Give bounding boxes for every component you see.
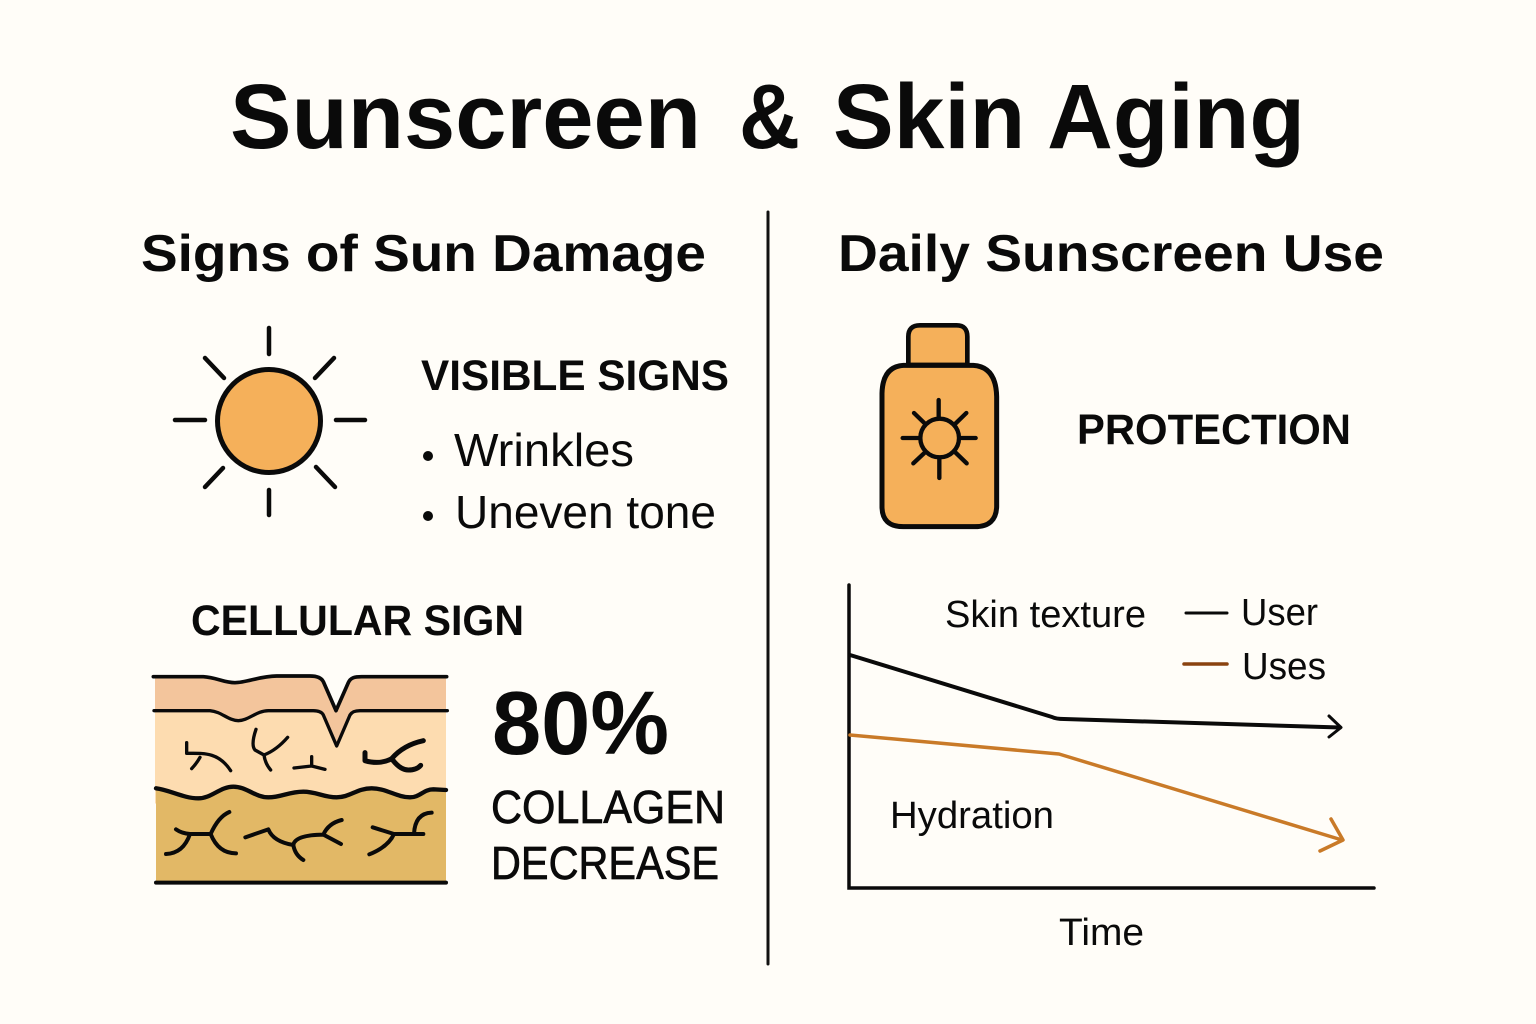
legend [1184, 592, 1326, 688]
stat: 80% collagen decrease: COLLAGEN [491, 781, 725, 833]
text: visible signs: VISIBLE SIGNS [421, 352, 729, 400]
line: user [850, 655, 1341, 737]
line: uses [850, 735, 1343, 851]
icon: skin cross-section [153, 676, 447, 883]
title: & [739, 66, 800, 168]
heading: signs of sun damage: Signs of Sun Damage [141, 225, 706, 283]
heading: cellular sign: CELLULAR SIGN [191, 597, 524, 645]
icon: sunscreen bottle [882, 325, 997, 527]
title: Skin Aging [833, 66, 1305, 168]
center divider [766, 212, 770, 964]
title: Sunscreen [230, 66, 701, 168]
text: visible signs: Uneven tone [455, 486, 716, 538]
legend: User [1241, 592, 1318, 634]
panel: daily sunscreen use [838, 225, 1384, 954]
title [230, 66, 1305, 168]
icon: sun [175, 328, 365, 515]
chart label: skin texture: Skin texture [945, 594, 1146, 636]
stat: 80% collagen decrease [491, 674, 725, 889]
stat: 80% collagen decrease: DECREASE [491, 837, 719, 889]
chart label: hydration: Hydration [890, 795, 1054, 837]
axis label: time: Time [1059, 912, 1144, 954]
line chart [849, 585, 1374, 954]
label: protection: PROTECTION [1077, 406, 1351, 454]
legend: Uses [1242, 646, 1326, 688]
chart axes [849, 585, 1374, 888]
text: visible signs [421, 352, 729, 538]
panel: signs of sun damage [141, 225, 729, 889]
text: visible signs: Wrinkles [454, 424, 634, 476]
stat: 80% collagen decrease: 80% [492, 674, 669, 774]
heading: daily sunscreen use: Daily Sunscreen Use [838, 225, 1384, 283]
